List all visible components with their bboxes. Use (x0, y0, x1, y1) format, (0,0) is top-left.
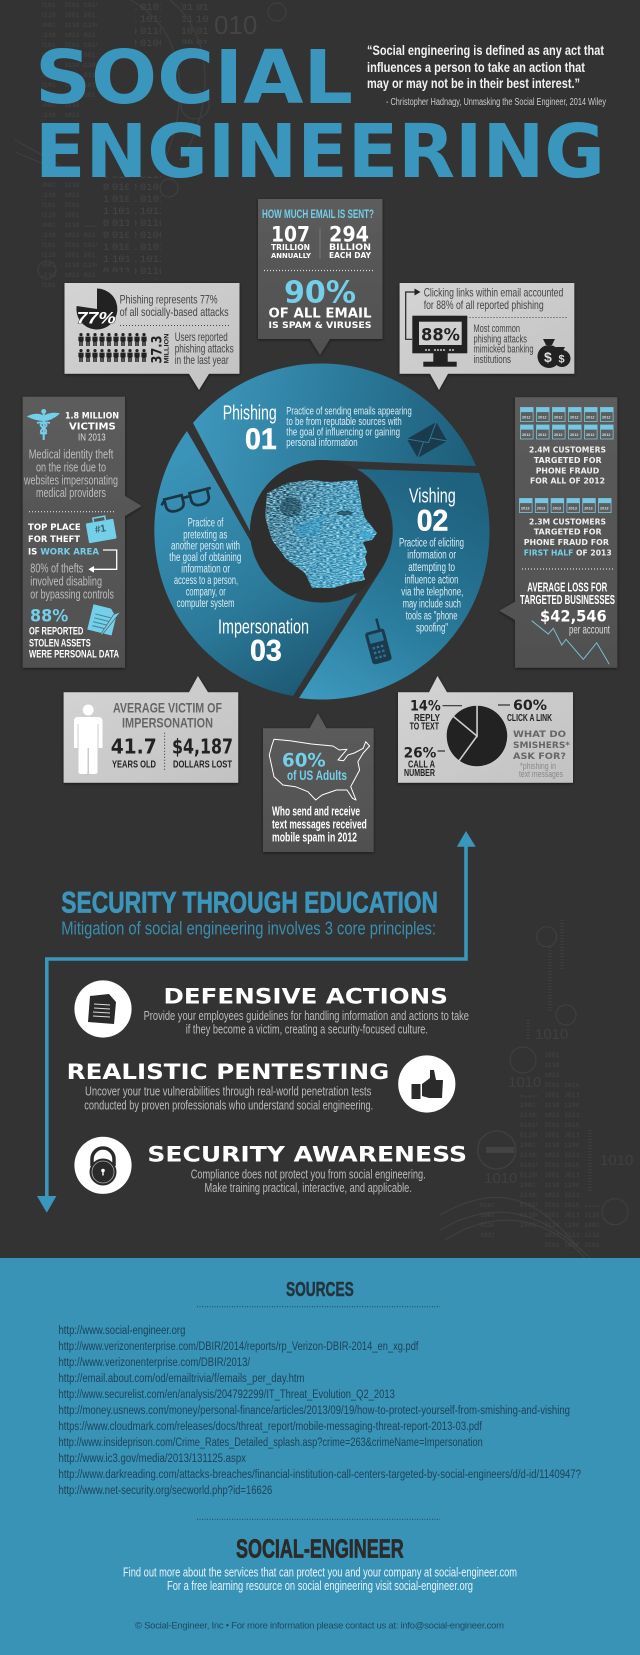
source links list: http://www.verizonenterprise.com/DBIR/2013/ (58, 1357, 251, 1369)
panel: phone fraud: FIRST HALF OF 2013 (524, 548, 612, 557)
source links list: https://www.cloudmark.com/releases/docs/threat_report/mobile-messaging-threat-report-2013-03.pdf (58, 1421, 483, 1433)
panel: mobile spam: text messages received (272, 818, 367, 832)
panel: mobile spam (263, 713, 374, 852)
panel: medical identity theft: OF REPORTED (29, 625, 83, 637)
call to action: Find out more about the services that can protect you and your company at social-engineer.com (123, 1566, 517, 1580)
segment: phishing: Phishing (223, 402, 277, 424)
panel: how much email is sent: 294 (329, 223, 369, 247)
panel: phishing statistics: MILLION (164, 334, 170, 364)
panel: what smishers ask for: 60% (513, 698, 547, 714)
panel: phone fraud: PHONE FRAUD (536, 466, 600, 475)
heading: sources: SOURCES (286, 1279, 354, 1301)
panel: what smishers ask for (398, 676, 573, 783)
panel: what smishers ask for: REPLY (414, 713, 440, 724)
segment: impersonation: information or (181, 563, 230, 575)
panel: average victim of impersonation: 41.7 (111, 734, 157, 758)
segment: phishing: the goal of influencing or gaining (286, 427, 400, 439)
arrow: connector from pinwheel to principles (37, 831, 476, 1213)
panel: clicking links: Most common (474, 323, 520, 335)
source links list: http://www.ic3.gov/media/2013/131125.aspx (58, 1453, 246, 1465)
panel: how much email is sent (258, 199, 382, 355)
principle: realistic pentesting: conducted by proven professionals who understand social engineering. (84, 1098, 373, 1112)
segment: impersonation: computer system (177, 598, 234, 610)
background pattern: 1010 (484, 1170, 517, 1187)
panel: what smishers ask for: WHAT DO (513, 730, 566, 740)
icon: monitor 88 percent: 88% (421, 326, 460, 346)
heading: security through education: Mitigation of social engineering involves 3 core principles: (61, 918, 436, 938)
panel: phishing statistics (64, 283, 240, 390)
icon: briefcase (85, 515, 117, 543)
panel: what smishers ask for: CLICK A LINK (507, 713, 553, 724)
panel: medical identity theft (23, 397, 142, 668)
icon: money bags: $ (558, 354, 565, 366)
panel: average victim of impersonation: DOLLARS LOST (173, 759, 232, 771)
segment: impersonation (154, 431, 357, 696)
quote: may or may not be in their best interest.” (367, 76, 580, 91)
logo: social-engineer: SOCIAL-ENGINEER (236, 1534, 404, 1564)
panel: what smishers ask for: ASK FOR? (513, 752, 566, 762)
panel: clicking links: for 88% of all reported phishing (424, 298, 544, 312)
segment: vishing (299, 469, 490, 700)
icon: mobile phone (362, 617, 392, 665)
panel: how much email is sent: 107 (271, 223, 310, 247)
principle: realistic pentesting (67, 1055, 455, 1113)
icon: glasses (160, 488, 214, 514)
panel: medical identity theft: 88% (30, 607, 68, 627)
panel: phone fraud: PHONE FRAUD FOR (524, 538, 609, 547)
panel: phishing statistics: Users reported (175, 330, 228, 344)
icon: caduceus (27, 409, 60, 440)
source links list: http://email.about.com/od/emailtrivia/f/emails_per_day.htm (58, 1373, 304, 1385)
icon: thumbs up (398, 1055, 455, 1113)
segment: phishing: personal information (286, 437, 358, 449)
background pattern: 1010 (508, 1074, 541, 1091)
panel: medical identity theft: Medical identity theft (29, 447, 114, 461)
heading: security through education: SECURITY THROUGH EDUCATION (61, 887, 438, 920)
principle: security awareness: SECURITY AWARENESS (147, 1143, 467, 1167)
panel: clicking links: phishing attacks (474, 334, 527, 346)
panel: how much email is sent: OF ALL EMAIL (268, 306, 372, 321)
title (35, 35, 605, 195)
panel: medical identity theft: or bypassing controls (30, 587, 114, 601)
source links list: http://www.net-security.org/secworld.php?id=16626 (58, 1485, 272, 1497)
call to action (123, 1566, 517, 1593)
segment: phishing: to be from reputable sources with (286, 416, 402, 428)
panel: phone fraud: 2.4M CUSTOMERS (529, 446, 606, 455)
panel: medical identity theft: VICTIMS (69, 421, 116, 432)
background pattern: 1010 (535, 1026, 568, 1043)
panel: phone fraud: TARGETED FOR (534, 528, 602, 537)
segment: impersonation: 03 (250, 635, 282, 668)
icon: person (74, 704, 102, 774)
panel: what smishers ask for: NUMBER (404, 768, 436, 779)
panel: phishing statistics: in the last year (175, 353, 229, 367)
segment: vishing: influence action (405, 574, 458, 586)
background pattern (15, 0, 633, 1258)
panel: mobile spam: of US Adults (287, 767, 347, 783)
panel: medical identity theft: websites impersonating (23, 473, 118, 487)
panel: how much email is sent: BILLION (329, 243, 371, 253)
panel: phone fraud: per account (569, 624, 611, 636)
panel: phone fraud: $42,546 (540, 607, 607, 626)
principle: security awareness (74, 1137, 467, 1195)
panel: medical identity theft: medical providers (36, 486, 106, 500)
panel: how much email is sent: HOW MUCH EMAIL IS SENT? (262, 207, 374, 221)
title: SOCIAL (35, 35, 353, 121)
principle: defensive actions: Provide your employees guidelines for handling information and actions to take (144, 1009, 469, 1023)
principle: defensive actions: if they become a victim, creating a security-focused culture. (186, 1023, 428, 1037)
segment: phishing: 01 (245, 423, 277, 456)
panel: medical identity theft: 80% of thefts (30, 561, 83, 575)
icon: envelope (407, 422, 447, 458)
panel: average victim of impersonation (64, 676, 238, 783)
panel: medical identity theft: IN 2013 (78, 432, 106, 444)
panel: average victim of impersonation: YEARS OLD (112, 759, 156, 771)
icon: 2012 calendars (520, 408, 613, 439)
source links list: http://www.verizonenterprise.com/DBIR/2014/reports/rp_Verizon-DBIR-2014_en_xg.pdf (58, 1341, 419, 1353)
panel: phishing statistics: of all socially-based attacks (120, 305, 229, 319)
panel: medical identity theft: 1.8 MILLION (65, 412, 119, 422)
panel: mobile spam: mobile spam in 2012 (272, 830, 357, 844)
panel: medical identity theft: on the rise due to (36, 460, 106, 474)
source links list: http://www.social-engineer.org (58, 1325, 185, 1337)
principle: security awareness: Make training practical, interactive, and applicable. (204, 1181, 412, 1195)
principle: realistic pentesting: REALISTIC PENTESTING (67, 1060, 389, 1084)
panel: what smishers ask for: 26% (404, 746, 437, 762)
panel: clicking links (400, 283, 574, 390)
arrow: monitor to text (406, 288, 420, 339)
heading: security through education (61, 887, 438, 938)
segment: phishing (193, 363, 476, 531)
icon: document (74, 980, 132, 1038)
icon: 77 percent pie: 77% (77, 308, 116, 327)
segment: vishing: tools as "phone (406, 611, 457, 623)
source links list: http://www.insideprison.com/Crime_Rates_Detailed_splash.asp?crime=263&crimeName=Impersonation (58, 1437, 483, 1449)
segment: impersonation: access to a person, (174, 575, 238, 587)
segment: impersonation: Practice of (188, 518, 224, 530)
segment: vishing: Vishing (409, 486, 456, 508)
segment: vishing: 02 (417, 505, 448, 538)
quote (367, 43, 606, 108)
call to action: For a free learning resource on social engineering visit social-engineer.org (167, 1579, 473, 1593)
face illustration (250, 460, 377, 588)
icon: money bags: $ (544, 349, 552, 365)
panel: mobile spam: 60% (282, 751, 326, 772)
panel: medical identity theft: IS WORK AREA (28, 547, 99, 557)
panel: medical identity theft: WERE PERSONAL DATA (29, 649, 119, 661)
panel: medical identity theft: STOLEN ASSETS (29, 637, 91, 649)
icon: US map (269, 739, 370, 800)
icon: 2013 calendars (520, 498, 611, 512)
segment: impersonation: pretexting as (183, 529, 227, 541)
icon: padlock (74, 1137, 132, 1194)
segment: impersonation: Impersonation (218, 616, 309, 638)
segment: impersonation: company, or (186, 586, 226, 598)
panel: how much email is sent: IS SPAM & VIRUSES (268, 321, 372, 331)
line chart: loss trend (532, 621, 609, 664)
icon: document with pen (87, 604, 121, 638)
background pattern: 1010 (600, 1152, 633, 1169)
panel: what smishers ask for: TO TEXT (410, 722, 439, 733)
icon: rows of people (78, 333, 147, 362)
panel: medical identity theft: FOR THEFT (28, 535, 80, 545)
panel: medical identity theft: involved disabling (30, 574, 102, 588)
panel: medical identity theft: TOP PLACE (28, 523, 81, 533)
segment: vishing: via the telephone, (401, 586, 463, 598)
principle: security awareness: Compliance does not protect you from social engineering. (191, 1167, 426, 1181)
source links list (58, 1325, 581, 1497)
panel: phishing statistics: phishing attacks (175, 342, 234, 356)
panel: mobile spam: Who send and receive (272, 805, 360, 819)
segment: vishing: attempting to (408, 562, 455, 574)
panel: phone fraud: 2.3M CUSTOMERS (529, 517, 606, 526)
panel: clicking links: institutions (474, 354, 511, 366)
panel: how much email is sent: 90% (284, 276, 356, 311)
panel: phone fraud: FOR ALL OF 2012 (530, 477, 605, 486)
panel: phishing statistics: Phishing represents 77% (120, 292, 218, 306)
panel: what smishers ask for: 14% (410, 699, 441, 715)
segment: vishing: Practice of eliciting (399, 538, 464, 550)
panel: what smishers ask for: CALL A (408, 760, 435, 771)
panel: what smishers ask for: text messages (519, 769, 563, 779)
segment: impersonation: another person with (171, 540, 240, 552)
panel: what smishers ask for: SMISHERS* (513, 741, 570, 751)
panel: average victim of impersonation: $4,187 (172, 734, 233, 758)
principle: realistic pentesting: Uncover your true vulnerabilities through real-world penetration tests (85, 1085, 371, 1099)
source links list: http://www.securelist.com/en/analysis/204792299/IT_Threat_Evolution_Q2_2013 (58, 1389, 395, 1401)
panel: phishing statistics: 37.3 (150, 336, 166, 364)
panel: average victim of impersonation: AVERAGE VICTIM OF (113, 700, 222, 716)
arrow: work area to thefts (88, 550, 117, 573)
principle: defensive actions: DEFENSIVE ACTIONS (164, 984, 448, 1008)
icon: 77 percent pie (76, 288, 117, 329)
panel: clicking links: mimicked banking (474, 344, 534, 356)
panel: how much email is sent: EACH DAY (329, 251, 372, 260)
segment: vishing: information or (407, 550, 456, 562)
background pattern: 010 (214, 10, 257, 40)
segment: phishing: Practice of sending emails appearing (286, 405, 412, 417)
panel: how much email is sent: TRILLION (271, 243, 310, 252)
panel: average victim of impersonation: IMPERSONATION (122, 714, 213, 730)
icon: money bags (538, 339, 570, 368)
panel: phone fraud: TARGETED FOR (534, 456, 602, 465)
panel: clicking links: Clicking links within email accounted (424, 286, 563, 300)
panel: what smishers ask for: *phishing in (520, 761, 556, 771)
principle: defensive actions (74, 980, 469, 1038)
icon: monitor 88 percent (412, 316, 467, 367)
panel: central pinwheel (154, 363, 490, 700)
panel: phone fraud (499, 397, 617, 668)
title: ENGINEERING (35, 109, 605, 195)
segment: vishing: may include such (403, 598, 461, 610)
segment: vishing: spoofing" (416, 623, 448, 635)
panel: sources footer (0, 1258, 640, 1655)
icon: briefcase: #1 (94, 523, 107, 536)
segment: impersonation: the goal of obtaining (169, 552, 241, 564)
quote: influences a person to take an action that (367, 60, 585, 75)
pie chart: smishing requests (446, 705, 508, 767)
copyright: © Social-Engineer, Inc • For more information please contact us at: info@social-engineer.com (135, 1620, 504, 1631)
panel: how much email is sent: ANNUALLY (271, 252, 312, 260)
